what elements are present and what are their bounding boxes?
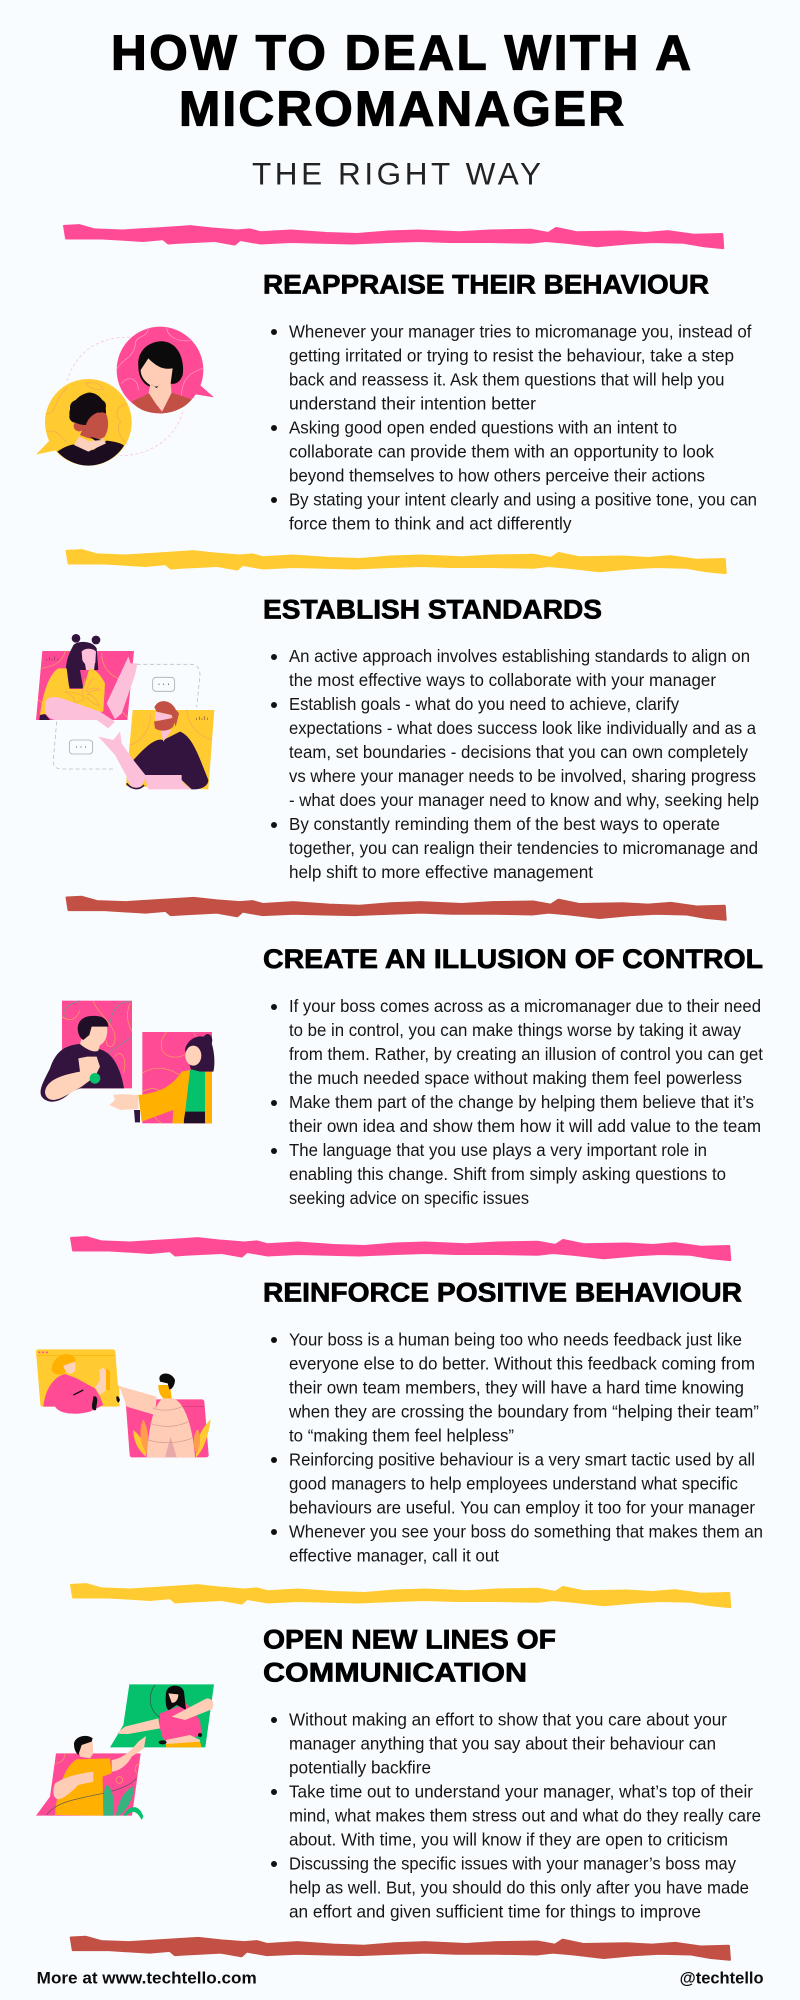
- bullet list: everyone else to do better. Without this feedback coming from: [289, 1353, 755, 1373]
- bullet list: collaborate can provide them with an opportunity to look: [289, 441, 714, 461]
- bullet list: about. With time, you will know if they are open to criticism: [289, 1829, 728, 1849]
- bullet list: behaviours are useful. You can employ it too for your manager: [289, 1497, 755, 1517]
- bullet list: their own idea and show them how it will add value to the team: [289, 1116, 761, 1136]
- illustration: two speech bubbles with portraits: [36, 327, 214, 466]
- heading: REINFORCE POSITIVE BEHAVIOUR: [263, 1278, 742, 1308]
- illustration: two people pointing at each other: [36, 1684, 214, 1820]
- bullet list: team, set boundaries - decisions that you can own completely: [289, 742, 748, 762]
- bullet list: to “making them feel helpless”: [289, 1425, 514, 1445]
- panel: create an illusion of control: [41, 944, 763, 1208]
- title: HOW TO DEAL WITH A: [111, 26, 691, 81]
- illustration: man with hand on chest and woman reaching out: [41, 1001, 214, 1123]
- bullet list: back and reassess it. Ask them questions that will help you: [289, 369, 724, 389]
- heading: REAPPRAISE THEIR BEHAVIOUR: [263, 270, 709, 300]
- bullet list: enabling this change. Shift from simply asking questions to: [289, 1164, 726, 1184]
- footer: website link: More at www.techtello.com: [37, 1968, 257, 1987]
- bullet list: [271, 646, 759, 882]
- bullet list: Take time out to understand your manager, what’s top of their: [289, 1781, 753, 1801]
- bullet list: - what does your manager need to know and why, seeking help: [289, 790, 759, 810]
- bullet list: help shift to more effective management: [289, 862, 593, 882]
- bullet list: force them to think and act differently: [289, 513, 572, 533]
- bullet list: to be in control, you can make things worse by taking it away: [289, 1020, 741, 1040]
- bullet list: an effort and given sufficient time for things to improve: [289, 1901, 701, 1921]
- bullet list: good managers to help employees understand what specific: [289, 1473, 738, 1493]
- bullet list: together, you can realign their tendencies to micromanage and: [289, 838, 758, 858]
- bullet list: [271, 322, 757, 533]
- bullet list: Whenever you see your boss do something that makes them an: [289, 1521, 763, 1541]
- bullet list: the much needed space without making them feel powerless: [289, 1068, 742, 1088]
- bullet list: [271, 996, 763, 1208]
- heading: [263, 1625, 556, 1688]
- bullet list: potentially backfire: [289, 1757, 431, 1777]
- bullet list: seeking advice on specific issues: [289, 1188, 529, 1208]
- bullet list: getting irritated or trying to resist the behaviour, take a step: [289, 345, 734, 365]
- bullet list: effective manager, call it out: [289, 1545, 499, 1565]
- illustration: two colleagues on video call: [36, 634, 214, 789]
- bullet list: Reinforcing positive behaviour is a very smart tactic used by all: [289, 1449, 755, 1469]
- bullet list: Discussing the specific issues with your manager’s boss may: [289, 1853, 736, 1873]
- bullet list: [271, 1709, 761, 1921]
- subtitle: THE RIGHT WAY: [252, 155, 541, 191]
- bullet list: The language that you use plays a very important role in: [289, 1140, 707, 1160]
- bullet list: Whenever your manager tries to micromanage you, instead of: [289, 322, 752, 342]
- heading: CREATE AN ILLUSION OF CONTROL: [263, 944, 763, 974]
- bullet list: If your boss comes across as a micromanager due to their need: [289, 996, 761, 1016]
- heading: OPEN NEW LINES OF: [263, 1625, 556, 1655]
- bullet list: By constantly reminding them of the best ways to operate: [289, 814, 720, 834]
- bullet list: By stating your intent clearly and using a positive tone, you can: [289, 489, 757, 509]
- bullet list: the most effective ways to collaborate with your manager: [289, 670, 716, 690]
- bullet list: beyond themselves to how others perceive their actions: [289, 465, 705, 485]
- title: MICROMANAGER: [179, 82, 624, 137]
- panel: reinforce positive behaviour: [36, 1278, 763, 1565]
- title: [111, 26, 691, 137]
- panel: open new lines of communication: [36, 1625, 761, 1921]
- bullet list: Asking good open ended questions with an intent to: [289, 417, 677, 437]
- bullet list: their own team members, they will have a hard time knowing: [289, 1377, 744, 1397]
- bullet list: manager anything that you say about their behaviour can: [289, 1733, 716, 1753]
- bullet list: Make them part of the change by helping them believe that it’s: [289, 1092, 754, 1112]
- footer: handle: @techtello: [680, 1968, 764, 1987]
- bullet list: expectations - what does success look like individually and as a: [289, 718, 756, 738]
- panel: establish standards: [36, 595, 759, 882]
- bullet list: An active approach involves establishing standards to align on: [289, 646, 750, 666]
- illustration: two people high-fiving through windows: [36, 1349, 211, 1457]
- bullet list: Your boss is a human being too who needs feedback just like: [289, 1329, 742, 1349]
- bullet list: understand their intention better: [289, 393, 536, 413]
- panel: reappraise their behaviour: [36, 270, 757, 533]
- bullet list: Establish goals - what do you need to achieve, clarify: [289, 694, 679, 714]
- heading: COMMUNICATION: [263, 1658, 527, 1688]
- bullet list: Without making an effort to show that you care about your: [289, 1709, 727, 1729]
- heading: ESTABLISH STANDARDS: [263, 595, 602, 625]
- bullet list: when they are crossing the boundary from “helping their team”: [288, 1401, 759, 1421]
- bullet list: from them. Rather, by creating an illusion of control you can get: [289, 1044, 763, 1064]
- bullet list: [271, 1329, 763, 1565]
- bullet list: vs where your manager needs to be involved, sharing progress: [289, 766, 756, 786]
- bullet list: help as well. But, you should do this only after you have made: [289, 1877, 749, 1897]
- bullet list: mind, what makes them stress out and what do they really care: [289, 1805, 761, 1825]
